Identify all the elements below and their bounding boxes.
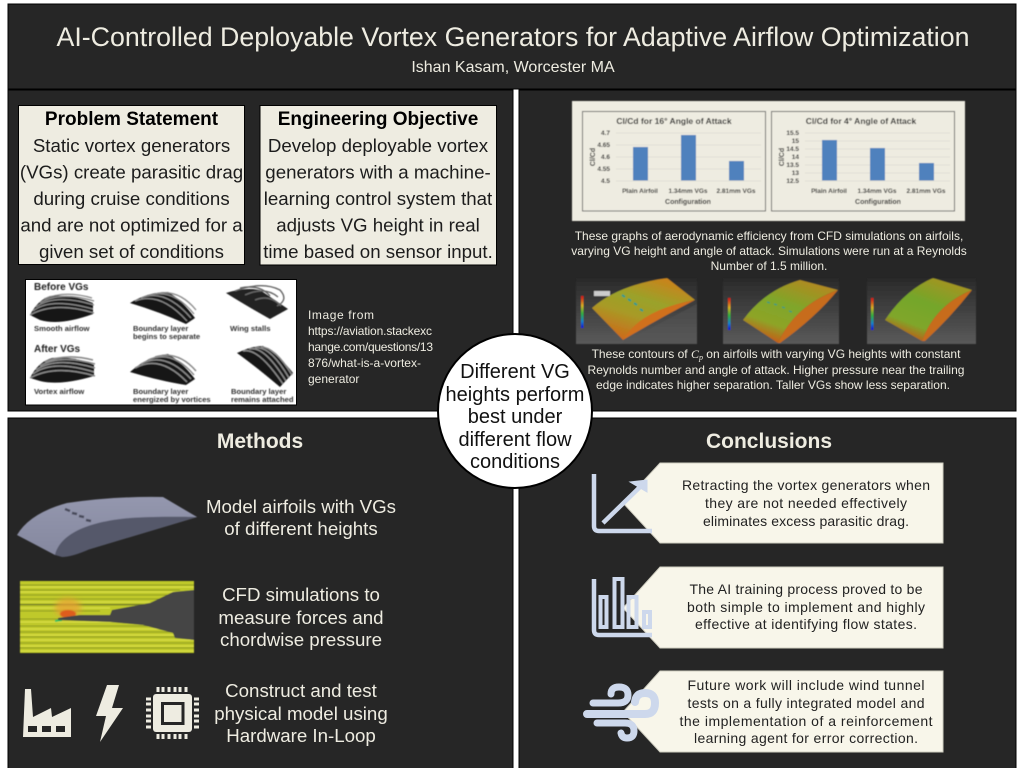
callout 3: tests on a fully integrated model and bbox=[688, 695, 924, 711]
wing: boundary layer energized bbox=[130, 354, 196, 385]
icon: bar chart bbox=[594, 579, 652, 635]
heading: conclusions: Conclusions bbox=[706, 430, 832, 453]
chart: Cl/Cd at 4 degrees: 14 bbox=[792, 154, 799, 161]
vortex generator illustration: Vortex airflow bbox=[34, 387, 84, 396]
engineering objective box: time based on sensor input. bbox=[263, 241, 493, 262]
author line: Ishan Kasam, Worcester MA bbox=[411, 59, 615, 76]
chart caption: Number of 1.5 million. bbox=[711, 259, 827, 273]
heading: methods: Methods bbox=[217, 430, 303, 453]
callout 3: Future work will include wind tunnel bbox=[688, 677, 924, 693]
panel: background and objective bbox=[8, 90, 513, 411]
problem statement box: during cruise conditions bbox=[33, 188, 230, 209]
callout 2: both simple to implement and highly bbox=[687, 599, 925, 615]
icon: wind bbox=[587, 687, 655, 738]
problem statement box: and are not optimized for a bbox=[20, 214, 243, 236]
panel: simulation results bbox=[519, 90, 1016, 411]
engineering objective box: Develop deployable vortex bbox=[268, 135, 489, 156]
center callout circle: conditions bbox=[470, 451, 560, 473]
engineering objective box: Engineering Objective bbox=[278, 109, 478, 130]
chart: Cl/Cd at 16 degrees: 1.34mm VGs bbox=[668, 188, 708, 195]
wing: smooth airflow bbox=[30, 294, 94, 322]
problem statement box: given set of conditions bbox=[39, 241, 224, 262]
icon: lightning bolt bbox=[96, 685, 123, 742]
problem statement box: Problem Statement bbox=[45, 109, 219, 130]
callout 2: The AI training process proved to be bbox=[690, 581, 923, 597]
engineering objective box: adjusts VG height in real bbox=[276, 214, 480, 236]
chart: Cl/Cd at 4 degrees: 15.5 bbox=[786, 130, 799, 137]
title: AI-Controlled Deployable Vortex Generators for Adaptive Airflow Optimization bbox=[56, 22, 970, 52]
vortex generator illustration: Boundary layer bbox=[133, 324, 188, 333]
chart caption: These graphs of aerodynamic efficiency from CFD simulations on airfoils, bbox=[575, 229, 963, 243]
engineering objective box: learning control system that bbox=[264, 188, 493, 209]
chart: Cl/Cd at 4 degrees: 15 bbox=[792, 138, 799, 145]
contour caption: on airfoils with varying VG heights with constant bbox=[703, 347, 961, 361]
callout 1: Retracting the vortex generators when bbox=[682, 477, 930, 493]
panel: title banner bbox=[8, 4, 1016, 89]
image source credit: generator bbox=[308, 372, 359, 386]
contour caption: Reynolds number and angle of attack. Higher pressure near the trailing bbox=[588, 363, 964, 377]
bar charts bbox=[572, 101, 965, 221]
heading: before VGs: Before VGs bbox=[34, 282, 89, 293]
chart: Cl/Cd at 4 degrees: 14.5 bbox=[786, 146, 799, 153]
center callout circle bbox=[438, 334, 592, 488]
callout 1 bbox=[623, 463, 943, 543]
panel: conclusions bbox=[519, 418, 1016, 768]
engineering objective box bbox=[260, 106, 496, 265]
chart: Cl/Cd at 4 degrees: 13 bbox=[792, 170, 799, 177]
contour caption: These contours of C bbox=[592, 347, 699, 361]
method text: CFD simulations bbox=[218, 584, 384, 650]
chart: Cl/Cd at 4 degrees bbox=[772, 112, 954, 211]
center callout circle: different flow bbox=[458, 429, 572, 451]
vortex generator illustration: Boundary layer bbox=[231, 387, 286, 396]
vortex generator illustration: begins to separate bbox=[133, 332, 200, 341]
center callout circle: heights perform bbox=[446, 384, 584, 406]
vortex generator illustration bbox=[26, 280, 296, 405]
chart: Cl/Cd at 16 degrees: 2.81mm VGs bbox=[716, 188, 756, 195]
icon: microchip bbox=[146, 687, 199, 739]
callout 2: effective at identifying flow states. bbox=[695, 616, 917, 632]
contour image 1 bbox=[576, 278, 697, 344]
icon: rising arrow chart bbox=[594, 474, 652, 531]
method text: model airfoils bbox=[206, 496, 396, 539]
image source credit: Image from bbox=[308, 308, 374, 322]
callout 1: eliminates excess parasitic drag. bbox=[703, 513, 909, 529]
chart caption: varying VG height and angle of attack. Simulations were run at a Reynolds bbox=[571, 244, 967, 258]
chart: Cl/Cd at 16 degrees: Cl/Cd bbox=[590, 148, 597, 166]
vortex generator illustration: Wing stalls bbox=[230, 324, 271, 333]
icon: factory bbox=[23, 689, 71, 737]
callout 3: learning agent for error correction. bbox=[694, 730, 918, 746]
chart: Cl/Cd at 16 degrees: 4.7 bbox=[601, 130, 610, 137]
wing: vortex airflow bbox=[30, 357, 95, 383]
vortex generator illustration: Smooth airflow bbox=[34, 324, 90, 333]
method text: CFD simulations: chordwise pressure bbox=[220, 629, 382, 650]
chart: Cl/Cd at 16 degrees: 4.6 bbox=[601, 154, 610, 161]
center callout circle: best under bbox=[468, 406, 563, 428]
chart: Cl/Cd at 16 degrees: 4.55 bbox=[597, 166, 610, 173]
contour image 2 bbox=[723, 278, 839, 344]
chart: Cl/Cd at 16 degrees: Plain Airfoil bbox=[622, 188, 658, 195]
image source credit: hange.com/questions/13 bbox=[308, 340, 433, 354]
contour caption: p bbox=[698, 353, 703, 362]
chart: Cl/Cd at 4 degrees: Cl/Cd for 4° Angle of Attack bbox=[806, 116, 916, 126]
image source credit: https://aviation.stackexc bbox=[308, 324, 432, 338]
chart: Cl/Cd at 4 degrees: Plain Airfoil bbox=[811, 188, 847, 195]
method text: physical model: Hardware In-Loop bbox=[226, 725, 376, 746]
chart: Cl/Cd at 4 degrees: 1.34mm VGs bbox=[857, 188, 897, 195]
method text: physical model: physical model using bbox=[214, 703, 388, 724]
contour caption bbox=[588, 347, 964, 392]
problem statement box: (VGs) create parasitic drag bbox=[20, 162, 243, 182]
callout 2 bbox=[623, 567, 943, 648]
chart: Cl/Cd at 16 degrees: 4.65 bbox=[597, 142, 610, 149]
wing: boundary layer remains attached bbox=[237, 346, 293, 387]
problem statement box: Static vortex generators bbox=[33, 135, 230, 156]
image: CFD streamlines bbox=[20, 581, 194, 653]
contour image 3 bbox=[867, 278, 976, 344]
vortex generator illustration: Boundary layer bbox=[133, 387, 188, 396]
wing: boundary layer begins to separate bbox=[130, 292, 196, 324]
callout 3: the implementation of a reinforcement bbox=[680, 713, 933, 729]
heading: after VGs: After VGs bbox=[34, 344, 81, 355]
method text: CFD simulations: CFD simulations to bbox=[222, 584, 380, 605]
callout 1: they are not needed effectively bbox=[705, 495, 907, 511]
callout 3 bbox=[623, 671, 943, 752]
chart: Cl/Cd at 16 degrees: Cl/Cd for 16° Angle of Attack bbox=[616, 116, 732, 126]
chart: Cl/Cd at 4 degrees: Cl/Cd bbox=[779, 148, 786, 166]
panel: methods bbox=[8, 418, 513, 768]
wing: stalls bbox=[226, 286, 288, 319]
chart: Cl/Cd at 4 degrees: 12.5 bbox=[786, 178, 799, 185]
chart: Cl/Cd at 16 degrees: Configuration bbox=[665, 199, 711, 206]
method text: CFD simulations: measure forces and bbox=[218, 607, 384, 628]
engineering objective box: generators with a machine- bbox=[265, 162, 491, 182]
vortex generator illustration: energized by vortices bbox=[133, 395, 211, 404]
image source credit bbox=[308, 308, 433, 386]
center callout circle: Different VG bbox=[460, 361, 570, 383]
problem statement box bbox=[18, 106, 244, 264]
method text: model airfoils: of different heights bbox=[224, 518, 378, 539]
chart: Cl/Cd at 16 degrees bbox=[582, 112, 766, 211]
contour caption: edge indicates higher separation. Taller VGs show less separation. bbox=[596, 378, 950, 392]
chart: Cl/Cd at 4 degrees: 2.81mm VGs bbox=[906, 188, 946, 195]
method text: physical model: Construct and test bbox=[225, 680, 378, 701]
chart: Cl/Cd at 16 degrees: 4.5 bbox=[601, 178, 610, 185]
chart: Cl/Cd at 4 degrees: Configuration bbox=[855, 199, 901, 206]
image: airfoil model bbox=[17, 497, 197, 557]
chart caption bbox=[571, 229, 967, 273]
vortex generator illustration: remains attached bbox=[231, 395, 294, 404]
image source credit: 876/what-is-a-vortex- bbox=[308, 356, 421, 370]
chart: Cl/Cd at 4 degrees: 13.5 bbox=[786, 162, 799, 169]
method text: model airfoils: Model airfoils with VGs bbox=[206, 496, 396, 517]
method text: physical model bbox=[214, 680, 388, 746]
